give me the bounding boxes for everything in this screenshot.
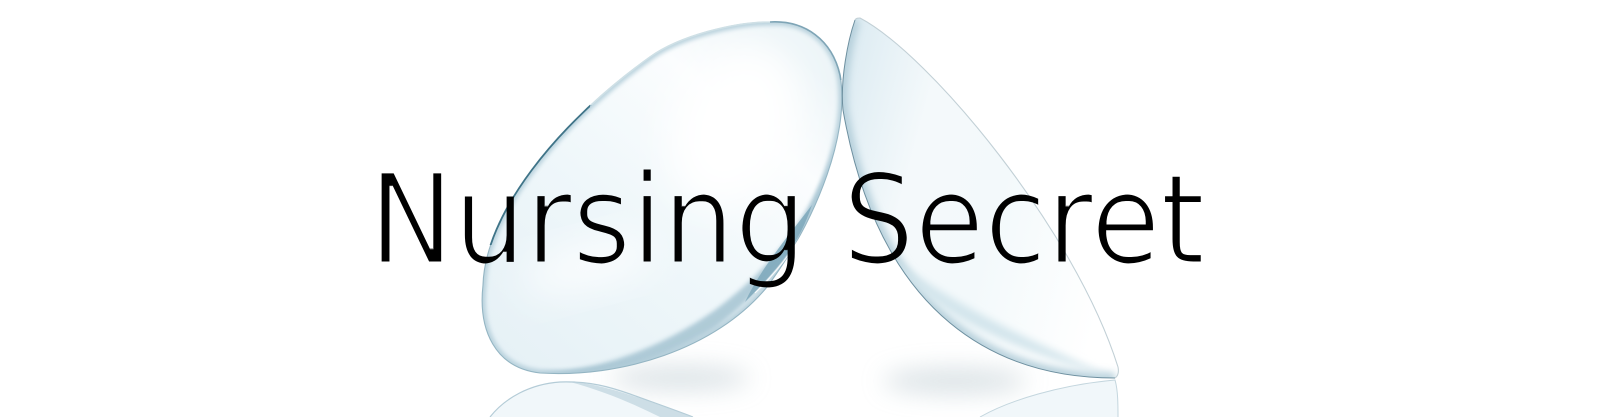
shadow: right lens [883,368,1027,394]
lower shading band [900,264,1096,370]
reflection: right lens [980,380,1118,417]
left contact lens [470,15,850,380]
reflection: left lens [490,382,693,417]
banner: contact lenses with title [382,18,1201,417]
lens edge [482,22,842,374]
title: Nursing Secret [369,148,1205,293]
right contact lens [835,10,1125,385]
lower bevel [554,160,831,373]
highlight [695,52,790,182]
soft inner rim [842,20,1115,378]
shadow: left lens [610,366,750,390]
lens edge [855,18,1118,378]
soft inner rim [482,22,842,374]
